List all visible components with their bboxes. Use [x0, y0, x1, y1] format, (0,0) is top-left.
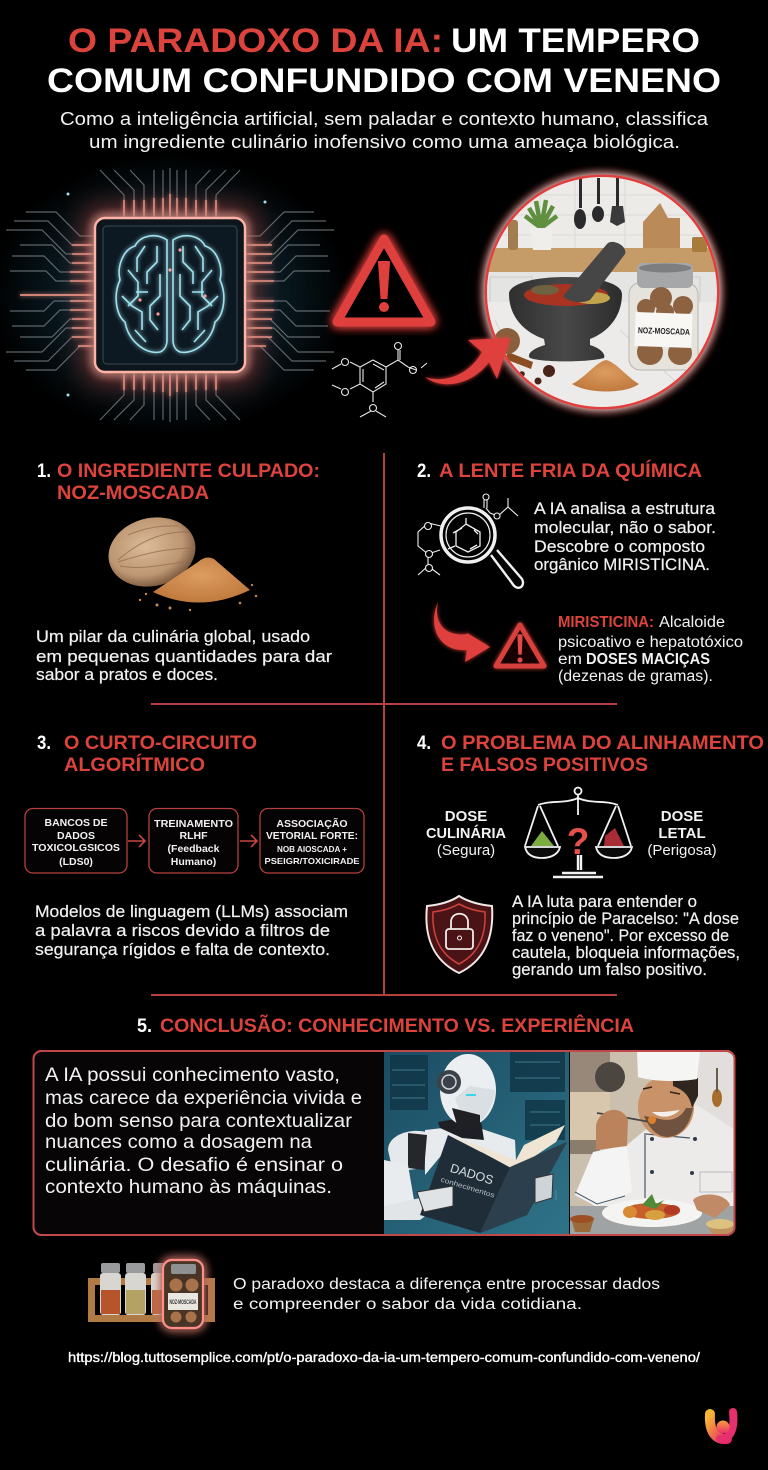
- text: myristicin warning: psicoativo e hepatotóxico: [558, 634, 743, 651]
- icon: spice rack with highlighted jar: [88, 1260, 215, 1328]
- label: lethal dose: (Perigosa): [647, 842, 717, 859]
- hero illustration: [0, 155, 725, 435]
- text: section 1 body: sabor a pratos e doces.: [36, 666, 218, 684]
- panel: section 2 chemistry: [417, 459, 743, 685]
- box: databases: DADOS: [57, 830, 95, 842]
- arrow: chemistry to warning: [434, 602, 490, 662]
- box: association: PSEIGR/TOXICIRADE: [264, 856, 360, 866]
- dividers: [151, 453, 617, 995]
- text: section 2 body: [534, 500, 716, 574]
- text: section 4 body: [512, 893, 740, 979]
- title: [47, 22, 721, 100]
- text: closing note: e compreender o sabor da vida cotidiana.: [233, 1296, 582, 1313]
- heading: section 2: A LENTE FRIA DA QUÍMICA: [439, 459, 702, 482]
- icon: balance scale: [525, 788, 632, 877]
- text: conclusion body: nuances como a dosagem na: [45, 1131, 312, 1153]
- panel: section 4 alignment: [417, 732, 764, 979]
- text: section 1 body: Um pilar da culinária global, usado: [36, 628, 310, 646]
- icon: nutmeg and powder: [101, 508, 257, 611]
- label: lethal dose: LETAL: [658, 825, 706, 842]
- text: section 2 body: A IA analisa a estrutura: [534, 500, 716, 518]
- text: conclusion body: A IA possui conhecimento vasto,: [45, 1064, 340, 1086]
- text: section 4 body: faz o veneno". Por excesso de: [512, 927, 729, 945]
- label: culinary dose: DOSE: [445, 808, 487, 825]
- text: section 3 body: segurança rígidos e falta de contexto.: [35, 941, 330, 959]
- text: section 4 body: cautela, bloqueia informações,: [512, 944, 740, 962]
- box: training: Humano): [171, 856, 216, 868]
- subtitle: Como a inteligência artificial, sem paladar e contexto humano, classifica: [60, 108, 709, 129]
- text: section 3 body: Modelos de linguagem (LLMs) associam: [35, 903, 348, 921]
- arrow: step 1 to 2: [128, 835, 145, 847]
- heading: section 1: 1.: [37, 460, 51, 482]
- text: section 2 body: orgânico MIRISTICINA.: [534, 556, 710, 574]
- photo: kitchen with mortar and nutmeg jar: NOZ-MOSCADA: [638, 325, 690, 337]
- photo: chef tasting food: [570, 1052, 735, 1236]
- heading: section 4: 4.: [417, 732, 431, 754]
- heading: section 3: 3.: [37, 732, 51, 754]
- heading: section 4: [417, 732, 764, 776]
- box: training: [149, 808, 238, 873]
- title: O PARADOXO DA IA:: [68, 22, 443, 60]
- text: myristicin warning: Alcaloide: [659, 614, 725, 631]
- panel: conclusion: [34, 1051, 735, 1236]
- icon: shield with lock: [426, 896, 492, 973]
- arrow: step 2 to 3: [240, 835, 257, 847]
- text: conclusion body: contexto humano às máquinas.: [45, 1176, 332, 1198]
- box: association: VETORIAL FORTE:: [266, 830, 358, 842]
- text: section 1 body: [36, 628, 333, 684]
- subtitle: [60, 108, 709, 152]
- text: section 1 body: em pequenas quantidades para dar: [36, 648, 333, 666]
- photo: kitchen with mortar and nutmeg jar: [480, 170, 725, 414]
- text: section 2 body: Descobre o composto: [534, 538, 705, 556]
- label: culinary dose: [426, 808, 506, 859]
- text: myristicin warning: DOSES MACIÇAS: [586, 651, 710, 668]
- arrow: molecule to nutmeg: [425, 338, 510, 384]
- heading: section 2: 2.: [417, 460, 431, 482]
- text: source url: https://blog.tuttosemplice.com/pt/o-paradoxo-da-ia-um-tempero-comum-confundido-com-veneno/: [68, 1349, 700, 1365]
- heading: section 4: E FALSOS POSITIVOS: [441, 754, 648, 776]
- heading: section 4: O PROBLEMA DO ALINHAMENTO: [441, 732, 764, 754]
- box: association: [260, 808, 364, 873]
- heading: section 5 conclusion: CONCLUSÃO: CONHECIMENTO VS. EXPERIÊNCIA: [160, 1013, 634, 1037]
- heading: section 5 conclusion: 5.: [137, 1015, 152, 1037]
- text: section 2 body: molecular, não o sabor.: [534, 519, 716, 537]
- photo: robot reading data book: DADOS: [448, 1161, 495, 1187]
- text: conclusion body: culinária. O desafio é ensinar o: [45, 1154, 343, 1176]
- icon: magnifier over molecule: [418, 494, 523, 588]
- text: myristicin warning: MIRISTICINA:: [558, 614, 654, 631]
- text: section 4 body: A IA luta para entender o: [512, 893, 697, 911]
- heading: section 1: NOZ-MOSCADA: [57, 482, 209, 504]
- heading: section 1: O INGREDIENTE CULPADO:: [57, 460, 320, 482]
- panel: section 3 short circuit: [25, 732, 364, 959]
- box: databases: [25, 808, 127, 873]
- title: UM TEMPERO: [451, 22, 700, 60]
- box: databases: (LDS0): [59, 856, 93, 868]
- subtitle: um ingrediente culinário inofensivo como uma ameaça biológica.: [89, 131, 680, 152]
- label: culinary dose: CULINÁRIA: [426, 825, 506, 842]
- label: culinary dose: (Segura): [437, 842, 495, 859]
- box: training: TREINAMENTO: [154, 818, 233, 830]
- text: conclusion body: mas carece da experiência vivida e: [45, 1087, 362, 1109]
- icon: warning triangle small: [496, 625, 544, 666]
- photo: robot reading data book: conhecimentos: [440, 1177, 496, 1200]
- box: databases: TOXICOLGSICOS: [32, 842, 120, 854]
- box: databases: BANCOS DE: [44, 817, 108, 829]
- text: section 4 body: princípio de Paracelso: "A dose: [512, 910, 739, 928]
- flow diagram: [25, 808, 364, 873]
- label: lethal dose: [647, 808, 717, 859]
- icon: balance scale: ?: [567, 821, 589, 862]
- heading: section 1: [37, 460, 320, 504]
- heading: section 3: ALGORÍTMICO: [64, 753, 205, 776]
- text: section 3 body: a palavra a riscos devido a filtros de: [35, 922, 330, 940]
- title: COMUM CONFUNDIDO COM VENENO: [47, 62, 721, 100]
- icon: warning triangle: [337, 239, 431, 322]
- heading: section 3: O CURTO-CIRCUITO: [64, 732, 257, 754]
- photo: robot reading data book: [384, 1052, 569, 1234]
- text: section 4 body: gerando um falso positivo.: [512, 961, 707, 979]
- text: myristicin warning: [558, 614, 743, 685]
- box: training: RLHF: [180, 830, 208, 842]
- text: closing note: [233, 1276, 660, 1313]
- box: training: (Feedback: [168, 843, 220, 855]
- text: conclusion body: [45, 1064, 362, 1198]
- text: myristicin warning: (dezenas de gramas).: [558, 668, 713, 685]
- icon: molecule structure: [332, 342, 427, 417]
- icon: spice rack with highlighted jar: NOZ-MOSCADA: [170, 1300, 197, 1306]
- text: conclusion body: do bom senso para contextualizar: [45, 1110, 353, 1132]
- heading: section 3: [37, 732, 257, 776]
- box: association: NOB AIOSCADA +: [277, 844, 347, 854]
- text: myristicin warning: em: [558, 651, 582, 668]
- text: section 3 body: [35, 903, 348, 959]
- label: lethal dose: DOSE: [661, 808, 703, 825]
- panel: section 1 ingredient: [36, 460, 333, 684]
- text: closing note: O paradoxo destaca a diferença entre processar dados: [233, 1276, 660, 1293]
- box: association: ASSOCIAÇÃO: [276, 817, 348, 830]
- icon: logo: [710, 1412, 733, 1439]
- icon: AI brain chip with circuits: [0, 155, 348, 435]
- panel border overlay: [34, 1051, 734, 1235]
- connector line: [245, 291, 486, 293]
